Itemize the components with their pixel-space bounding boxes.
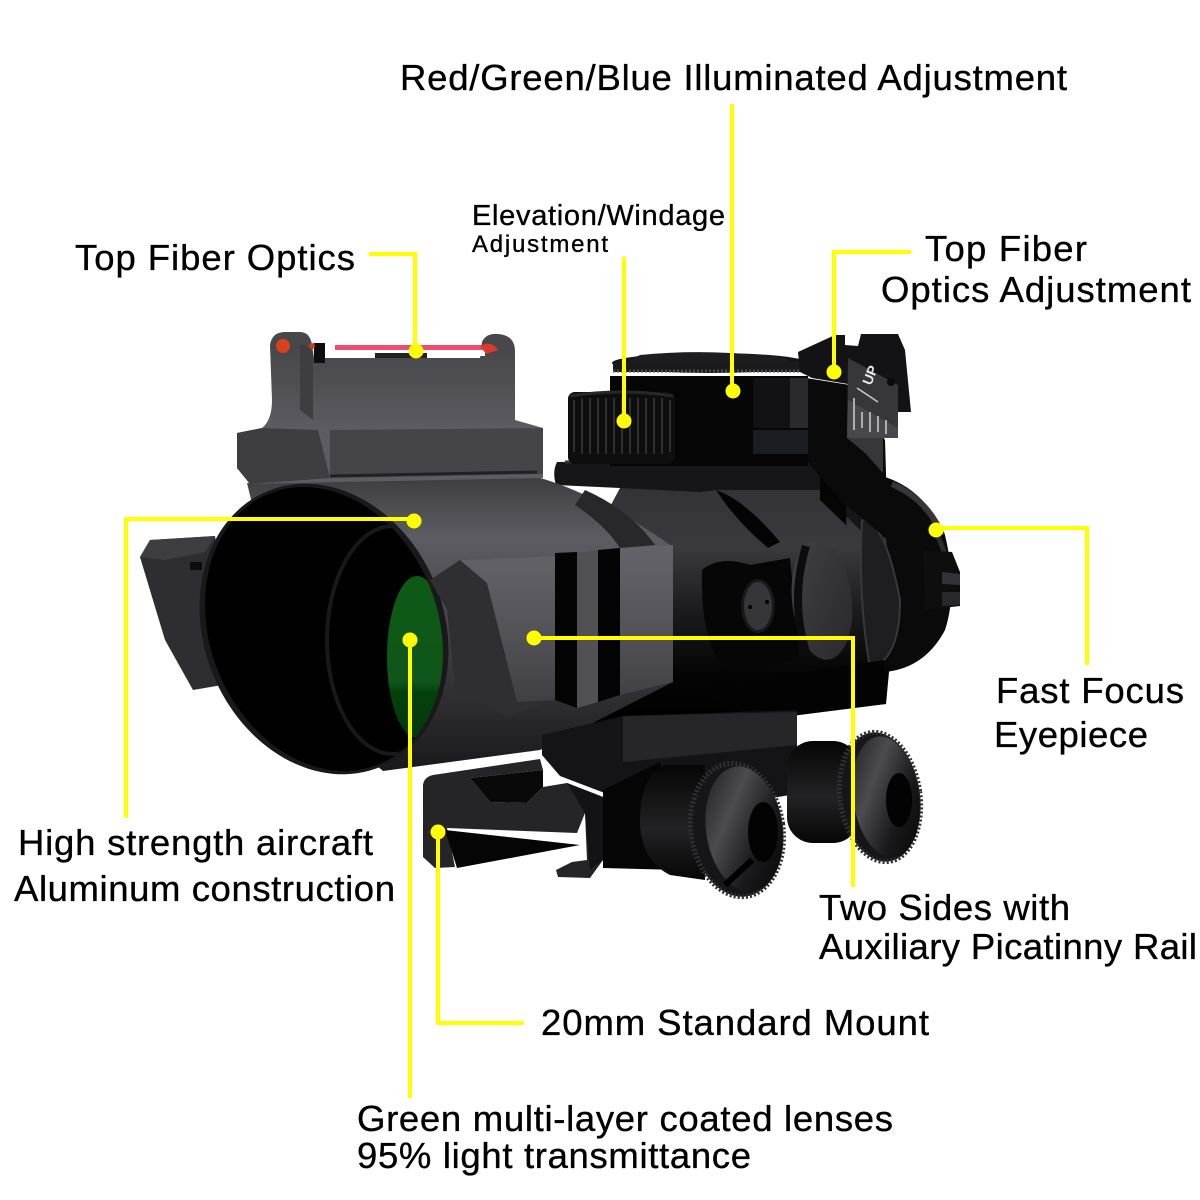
label: aluminum construction [14,822,395,909]
objective tube [247,477,673,771]
callout line: picatinny rail [526,630,853,887]
tube shoulder shading [575,490,655,548]
callout line: standard mount [430,824,524,1023]
label: elevation windage adjustment [472,200,725,258]
label: picatinny rail: Two Sides with [819,887,1070,928]
label: picatinny rail: Auxiliary Picatinny Rail [819,926,1197,967]
objective opening [157,446,491,812]
rear side rail fin [140,536,240,690]
pin disc [741,579,775,633]
inner ring [325,524,401,756]
callout line: green lenses [402,632,418,1098]
label: aluminum construction: Aluminum construction [14,868,395,909]
windage cap [786,537,858,663]
label: aluminum construction: High strength aircraft [18,822,373,863]
label: green lenses: Green multi-layer coated lenses [357,1098,893,1139]
eyepiece [885,477,960,672]
label: top fiber optics adjustment: Optics Adjustment [881,269,1191,310]
label: elevation windage adjustment: Elevation/Windage [472,200,725,232]
sight base rail [237,332,543,484]
label: top fiber optics adjustment: Top Fiber [925,228,1087,269]
callout line: elevation windage [616,257,632,428]
callout line: top fiber optics adjustment [826,252,911,380]
callout line: aluminum construction [126,514,422,818]
label: top fiber optics: Top Fiber Optics [75,237,355,278]
scope product illustration [140,332,960,903]
side picatinny rail [430,545,673,717]
label: illuminated adjustment: Red/Green/Blue Illuminated Adjustment [400,57,1067,98]
label: standard mount: 20mm Standard Mount [541,1002,929,1043]
label: green lenses: 95% light transmittance [357,1135,751,1176]
sight base [806,378,888,540]
rear fiber sight [798,334,911,473]
mount base [423,759,680,878]
callout line: top fiber optics [369,254,424,358]
rear fiber sight: UP [859,363,881,387]
label: elevation windage adjustment: Adjustment [472,231,608,258]
label: picatinny rail [819,887,1197,967]
front thumb screw [640,757,792,903]
turret: illumination dial [610,352,808,466]
callout line: eyepiece [928,522,1087,665]
callout line: illuminated adjustment [726,104,740,398]
red fiber optic [276,339,498,358]
label: fast focus eyepiece: Eyepiece [994,714,1148,755]
green lens [387,576,447,738]
rear thumb screw [787,727,929,867]
label: fast focus eyepiece [994,670,1184,755]
main rear body [554,460,900,742]
label: top fiber optics adjustment [881,228,1191,310]
label: fast focus eyepiece: Fast Focus [996,670,1184,711]
lower mount block [542,710,800,810]
label: green lenses [357,1098,893,1176]
turret: elevation knob [568,392,675,464]
